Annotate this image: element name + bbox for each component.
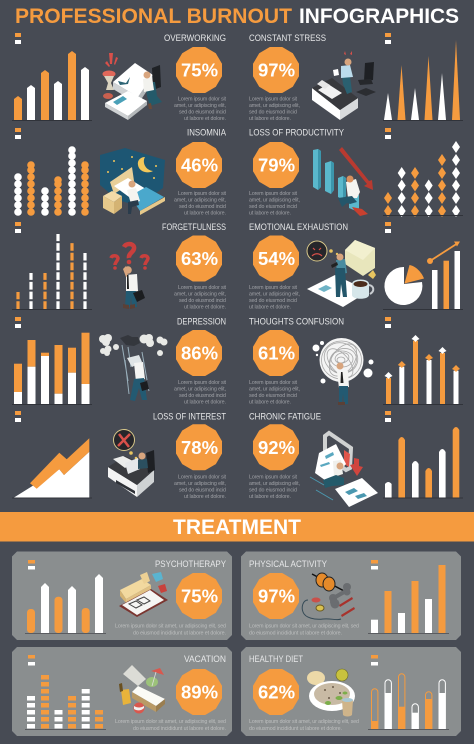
text block: amet, ur adipiscing elit,: [249, 103, 300, 109]
percent badge: [176, 47, 222, 93]
text block: ut labore et dolore.: [184, 400, 226, 406]
icon: exhausted person with money and coffee: [307, 240, 376, 307]
panel: healthy diet: [241, 647, 461, 736]
text block: amet, ur adipiscing elit,: [174, 103, 226, 109]
panel: forgetfulness: [12, 222, 227, 311]
percent badge: [176, 236, 222, 282]
text block: [249, 96, 300, 122]
text block: [115, 719, 226, 732]
percent badge: 89%: [181, 682, 218, 702]
text block: Lorem ipsum dolor sit amet, ur adipiscing elit, sed: [249, 719, 359, 725]
title: INFOGRAPHICS: [299, 5, 459, 28]
stacked bar chart: [12, 333, 92, 404]
panel: loss of interest: [12, 411, 227, 500]
percent badge: [176, 330, 222, 376]
legend: [15, 222, 21, 233]
text block: [249, 380, 300, 406]
panel: insomnia: [14, 128, 227, 217]
block column chart: [25, 675, 106, 730]
icon: sleepless person on bed: [100, 148, 165, 215]
text block: amet, ur adipiscing elit,: [249, 387, 300, 393]
diamond column chart: [383, 141, 463, 217]
text block: ut labore et dolore.: [249, 211, 291, 217]
title: FORGETFULNESS: [162, 222, 226, 233]
text block: amet, ur adipiscing elit,: [174, 292, 226, 298]
percent badge: [253, 47, 299, 93]
text block: ut labore et dolore.: [184, 494, 226, 500]
percent badge: [253, 330, 299, 376]
icon: plate of food, bread, apple and juice: [307, 669, 355, 716]
title: CONSTANT STRESS: [249, 33, 326, 44]
text block: ut labore et dolore.: [249, 305, 291, 311]
text block: [249, 285, 300, 311]
percent badge: 75%: [181, 586, 218, 606]
text block: Lorem ipsum dolor sit: [249, 380, 298, 386]
legend: [385, 317, 391, 328]
text block: [249, 719, 359, 732]
text block: [174, 285, 227, 311]
title: HEALTHY DIET: [249, 654, 303, 665]
percent badge: 92%: [258, 437, 295, 458]
percent badge: [253, 236, 299, 282]
text block: do eiusmod incididunt ut labore et dolore.: [133, 630, 226, 636]
text block: sed do eiusmod incid: [249, 298, 297, 304]
legend: [15, 317, 21, 328]
percent badge: 78%: [181, 437, 218, 458]
percent badge: 61%: [258, 342, 295, 364]
text block: Lorem ipsum dolor sit amet, ur adipiscing elit, sed: [115, 624, 226, 630]
icon: exercise equipment: [302, 573, 355, 620]
text block: [249, 474, 300, 500]
percent badge: 97%: [258, 586, 295, 606]
title: [15, 5, 459, 28]
icon: stressed person at desk: [312, 51, 376, 120]
panel: constant stress: [249, 33, 463, 122]
percent badge: [176, 669, 222, 715]
text block: sed do eiusmod incid: [179, 110, 226, 116]
percent badge: [176, 424, 222, 470]
title: PHYSICAL ACTIVITY: [249, 559, 327, 570]
icon: falling bars with red arrow and person: [313, 147, 373, 216]
text block: amet, ur adipiscing elit,: [174, 481, 226, 487]
text block: amet, ur adipiscing elit,: [174, 198, 226, 204]
legend: [15, 128, 21, 139]
title: VACATION: [184, 654, 226, 665]
legend: [28, 655, 35, 666]
panel: loss of productivity: [249, 128, 463, 217]
legend: [371, 560, 378, 570]
panel: thoughts confusion: [249, 316, 463, 406]
bar chart: [12, 51, 92, 120]
tube bar chart: [368, 674, 449, 730]
legend: [15, 33, 21, 44]
percent badge: [176, 573, 222, 619]
title: LOSS OF PRODUCTIVITY: [249, 128, 344, 138]
treatment banner: [0, 512, 474, 542]
treatment banner: TREATMENT: [173, 516, 301, 539]
text block: Lorem ipsum dolor sit: [249, 285, 298, 291]
text block: [174, 380, 227, 406]
rounded bar chart: [383, 427, 463, 498]
pie and bar chart: [383, 242, 463, 310]
percent badge: 62%: [258, 682, 295, 702]
text block: sed do eiusmod incid: [179, 298, 226, 304]
panel: psychotherapy: [12, 552, 232, 640]
title: PSYCHOTHERAPY: [155, 559, 226, 569]
title: LOSS OF INTEREST: [153, 411, 226, 422]
text block: do eiusmod incididunt ut labore et dolore.: [249, 630, 342, 636]
title: DEPRESSION: [177, 316, 226, 328]
text block: Lorem ipsum dolor sit amet, ur adipiscing elit, sed: [249, 624, 359, 630]
percent badge: [253, 573, 299, 619]
capped bar chart: [383, 335, 463, 404]
icon: tired person with low battery and papers: [310, 433, 378, 507]
text block: Lorem ipsum dolor sit amet, ur adipiscing elit, sed: [115, 719, 226, 725]
percent badge: [253, 424, 299, 470]
percent badge: 63%: [181, 248, 218, 269]
text block: sed do eiusmod incid: [249, 204, 297, 210]
legend: [15, 411, 21, 422]
percent badge: [253, 142, 299, 188]
text block: ut labore et dolore.: [184, 305, 226, 311]
panel: physical activity: [241, 552, 461, 640]
text block: amet, ur adipiscing elit,: [249, 481, 300, 487]
icon: person at desk with crossed-out thought: [108, 430, 155, 497]
text block: ut labore et dolore.: [249, 494, 291, 500]
icon: person with tangled thoughts: [312, 338, 374, 405]
legend: [385, 128, 391, 139]
text block: [249, 191, 300, 217]
text block: amet, ur adipiscing elit,: [174, 387, 226, 393]
panel: vacation: [12, 647, 232, 736]
text block: ut labore et dolore.: [249, 400, 291, 406]
percent badge: 54%: [258, 248, 295, 269]
text block: Lorem ipsum dolor sit: [249, 96, 298, 102]
percent badge: [176, 142, 222, 188]
text block: [174, 96, 227, 122]
legend: [385, 411, 391, 422]
icon: couch and clipboard: [119, 572, 168, 617]
legend: [371, 655, 378, 666]
text block: sed do eiusmod incid: [249, 393, 297, 399]
text block: Lorem ipsum dolor sit: [249, 474, 298, 480]
text block: amet, ur adipiscing elit,: [249, 198, 300, 204]
text block: sed do eiusmod incid: [249, 488, 297, 494]
percent badge: 75%: [181, 60, 218, 80]
text block: sed do eiusmod incid: [249, 110, 297, 116]
title: THOUGHTS CONFUSION: [249, 316, 344, 328]
legend: [28, 560, 35, 570]
text block: sed do eiusmod incid: [179, 488, 226, 494]
panel: depression: [12, 316, 227, 406]
text block: ut labore et dolore.: [249, 116, 291, 122]
text block: Lorem ipsum dolor sit: [249, 191, 298, 197]
icon: depressed person under rain clouds: [99, 334, 168, 401]
text block: Lorem ipsum dolor sit: [178, 191, 227, 197]
text block: amet, ur adipiscing elit,: [249, 292, 300, 298]
title: OVERWORKING: [164, 33, 226, 44]
icon: confused person with question marks: [111, 244, 148, 309]
text block: [115, 624, 226, 636]
text block: sed do eiusmod incid: [179, 204, 226, 210]
text block: Lorem ipsum dolor sit: [178, 96, 227, 102]
text block: [174, 474, 227, 500]
percent badge: 79%: [258, 154, 295, 176]
percent badge: 86%: [181, 342, 218, 364]
bar chart: [25, 574, 106, 634]
panel: overworking: [12, 33, 227, 122]
dashed column chart: [12, 234, 92, 310]
title: PROFESSIONAL BURNOUT: [15, 5, 292, 28]
text block: do eiusmod incididunt ut labore et dolore.: [133, 726, 226, 732]
title: CHRONIC FATIGUE: [249, 411, 321, 422]
text block: do eiusmod incididunt ut labore et dolore.: [249, 726, 342, 732]
text block: Lorem ipsum dolor sit: [178, 474, 227, 480]
icon: sun lounger with luggage and umbrella: [119, 665, 165, 714]
percent badge: 46%: [181, 154, 218, 176]
icon: overworked person with paper stacks: [102, 53, 162, 120]
spike chart: [383, 40, 463, 120]
text block: sed do eiusmod incid: [179, 393, 226, 399]
text block: [174, 191, 227, 217]
text block: Lorem ipsum dolor sit: [178, 285, 227, 291]
panel: emotional exhaustion: [249, 222, 463, 311]
text block: ut labore et dolore.: [184, 116, 226, 122]
percent badge: 97%: [258, 60, 295, 80]
text block: ut labore et dolore.: [184, 211, 226, 217]
bar chart: [368, 565, 449, 634]
title: INSOMNIA: [187, 128, 226, 138]
percent badge: [253, 669, 299, 715]
panel: chronic fatigue: [249, 411, 463, 507]
legend: [385, 222, 391, 233]
dotted column chart: [14, 146, 89, 216]
text block: [249, 624, 359, 636]
title: EMOTIONAL EXHAUSTION: [249, 222, 348, 233]
area chart: [12, 438, 92, 498]
legend: [385, 33, 391, 44]
text block: Lorem ipsum dolor sit: [178, 380, 227, 386]
